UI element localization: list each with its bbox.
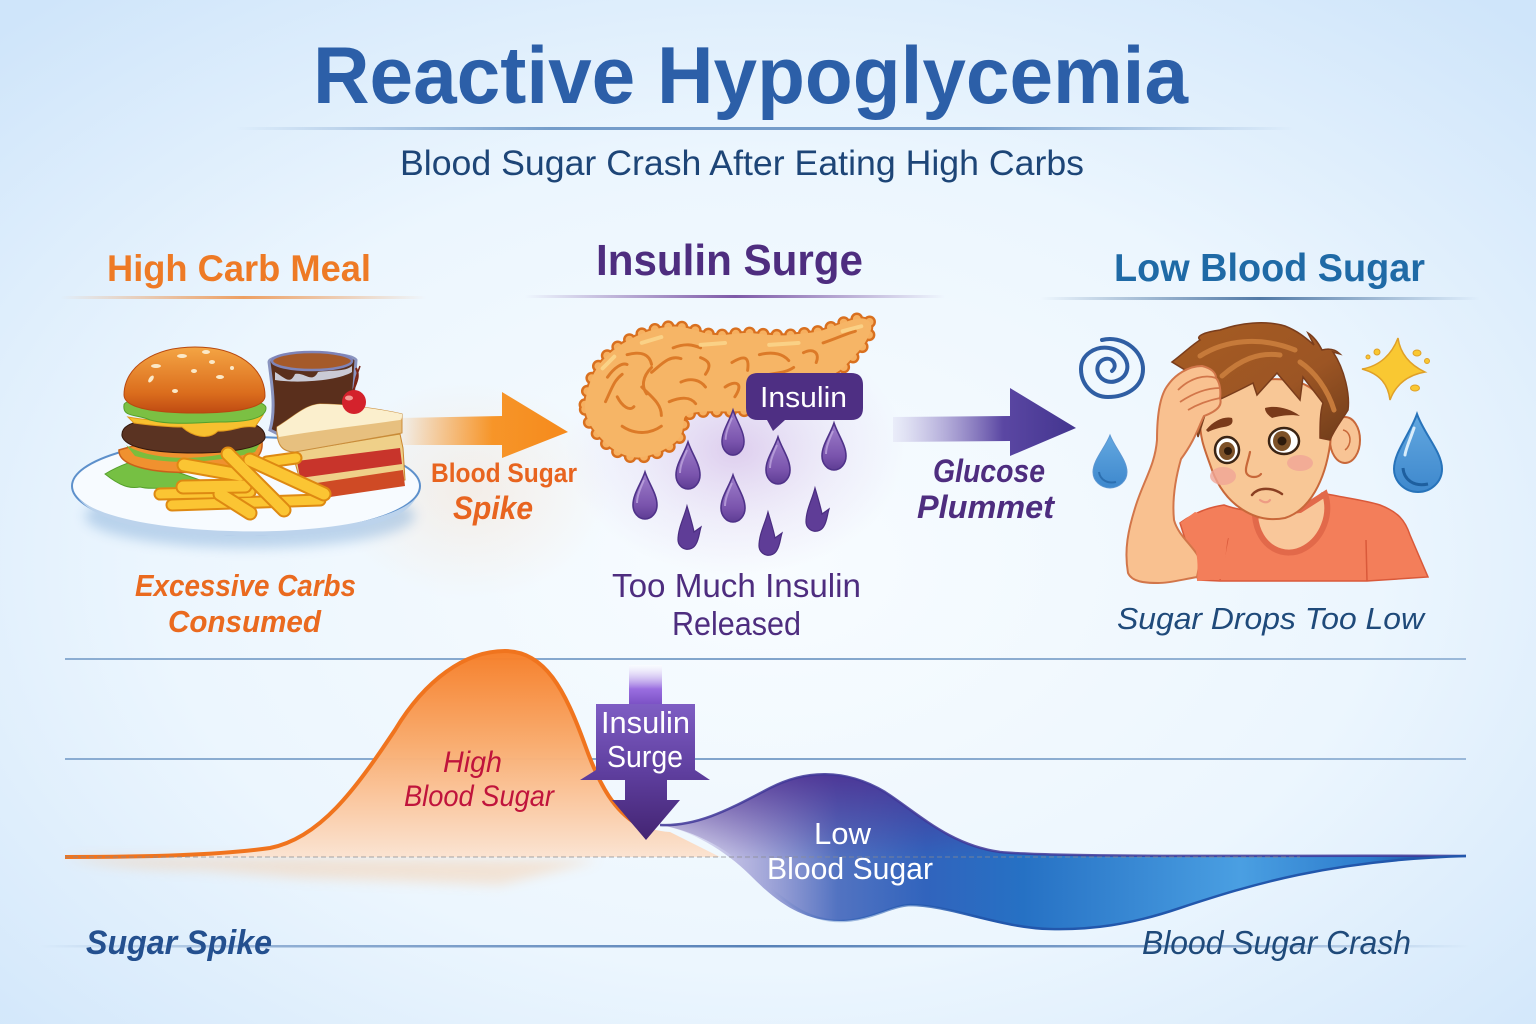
plate	[72, 437, 420, 548]
glow: orange behind spike label	[330, 380, 610, 600]
label: high blood sugar: High	[443, 746, 502, 779]
heading: insulin surge	[525, 236, 945, 298]
nose and mouth	[1246, 452, 1282, 502]
dashed baseline	[65, 856, 1300, 858]
label: excessive carbs consumed: Excessive Carbs	[135, 568, 356, 603]
label: high blood sugar	[404, 746, 555, 813]
cheeks	[1210, 455, 1313, 485]
label: too much insulin released: Released	[672, 605, 801, 642]
label: too much insulin released	[612, 567, 861, 642]
crash outline	[660, 774, 1466, 856]
sleeve	[1180, 512, 1228, 581]
callout: insulin bubble	[746, 373, 863, 431]
eyes	[1215, 428, 1299, 463]
crash purple top tint	[660, 774, 1000, 862]
title underline	[235, 127, 1295, 130]
glow: pancreas and insulin	[565, 325, 905, 575]
label: blood sugar spike	[431, 458, 577, 526]
fingers	[1178, 376, 1220, 410]
french fries	[160, 454, 324, 513]
icon: pancreas	[585, 318, 871, 458]
chart: blood sugar curve	[40, 651, 1470, 948]
crash lower edge	[770, 856, 1466, 929]
arrow: glucose plummet	[893, 388, 1076, 456]
crash fill	[660, 774, 1466, 929]
cake slice	[277, 404, 405, 497]
label: too much insulin released: Too Much Insulin	[612, 567, 861, 604]
shirt	[1180, 493, 1428, 581]
drink cup	[269, 352, 358, 440]
label: glucose plummet: Plummet	[917, 489, 1055, 525]
icon: sparkle star	[1362, 338, 1430, 400]
icon: high carb meal plate	[72, 347, 420, 548]
hair	[1172, 323, 1348, 440]
arrow: insulin surge: Insulin	[601, 705, 690, 740]
label: sugar drops too low: Sugar Drops Too Low	[1117, 601, 1427, 636]
chart grid lines	[40, 658, 1470, 948]
heading: insulin surge: Insulin Surge	[596, 236, 863, 285]
icon: dizzy spiral	[1081, 339, 1143, 397]
label: excessive carbs consumed	[135, 568, 356, 639]
sugar spike curve	[65, 651, 720, 857]
label: high blood sugar: Blood Sugar	[404, 780, 555, 813]
label: blood sugar spike: Spike	[453, 490, 533, 526]
face	[1200, 379, 1331, 519]
icon: large sweat drop	[1394, 414, 1442, 492]
eyebrows	[1206, 407, 1300, 432]
orange glow below baseline	[65, 857, 600, 885]
arrow: insulin surge: Surge	[607, 739, 683, 774]
illustration: dizzy boy	[1126, 323, 1428, 583]
label: low blood sugar	[767, 816, 933, 886]
icon: small sweat drop	[1093, 435, 1127, 488]
heading: high carb meal: High Carb Meal	[107, 248, 371, 289]
subtitle: Blood Sugar Crash After Eating High Carbs	[400, 144, 1084, 183]
burger	[105, 347, 266, 491]
label: blood sugar crash: Blood Sugar Crash	[1142, 924, 1411, 961]
arrow: insulin surge	[580, 665, 710, 840]
heading: low blood sugar	[1040, 247, 1480, 300]
label: blood sugar spike: Blood Sugar	[431, 458, 577, 488]
label: low blood sugar: Low	[814, 816, 872, 851]
callout: insulin bubble: Insulin	[760, 382, 847, 414]
label: low blood sugar: Blood Sugar	[767, 851, 933, 886]
label: excessive carbs consumed: Consumed	[168, 604, 322, 639]
label: sugar spike: Sugar Spike	[86, 924, 272, 962]
arrow: blood sugar spike	[400, 392, 568, 458]
cherry	[342, 366, 366, 414]
label: glucose plummet	[917, 453, 1055, 525]
arm and hand	[1126, 366, 1221, 583]
label: glucose plummet: Glucose	[933, 453, 1045, 489]
ear	[1330, 417, 1360, 463]
heading: low blood sugar: Low Blood Sugar	[1114, 247, 1425, 290]
neck and collar	[1255, 494, 1327, 553]
shirt fold	[1220, 538, 1367, 581]
insulin drops	[633, 410, 846, 555]
heading: high carb meal	[60, 248, 426, 299]
title: Reactive Hypoglycemia	[313, 31, 1189, 121]
